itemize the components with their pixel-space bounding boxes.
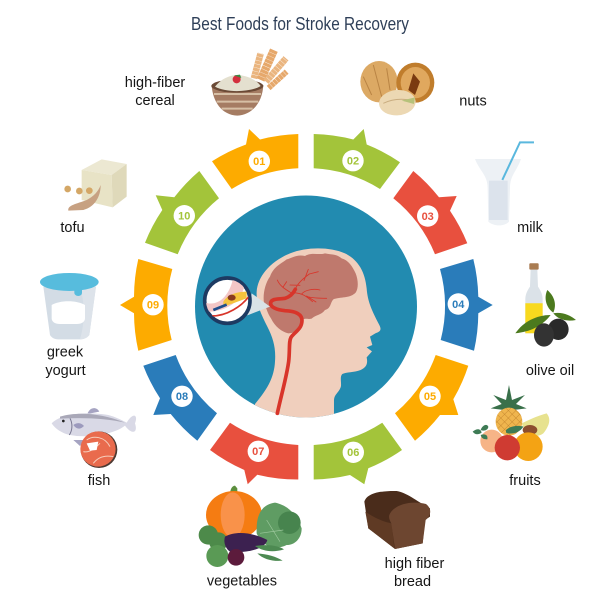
label: milk: milk: [517, 220, 544, 236]
segment 07: [210, 423, 298, 484]
label: high-fiber cereal: [125, 75, 185, 109]
icon: high fiber bread: [364, 491, 430, 549]
title: Best Foods for Stroke Recovery: [191, 14, 409, 34]
segment 04: 04: [452, 299, 465, 311]
label: high fiber bread: high fiber: [385, 556, 444, 572]
segment 03: [393, 171, 467, 254]
artery: [271, 269, 327, 413]
pointer triangle: [247, 293, 270, 315]
head silhouette: [255, 248, 381, 420]
icon: olive oil: [515, 263, 576, 347]
icon: high-fiber cereal bowl: [211, 50, 287, 116]
segment 01: 01: [253, 156, 265, 168]
segment 01: [212, 129, 298, 189]
segment 09: [120, 259, 172, 351]
label: olive oil: olive oil: [526, 363, 574, 379]
label: fruits: fruits: [509, 473, 541, 489]
label: high-fiber cereal: high-fiber: [125, 75, 185, 91]
icon: fish and salmon steak: [52, 408, 136, 468]
label: high fiber bread: [385, 556, 444, 590]
segment 05: [395, 355, 468, 441]
segment 09: 09: [147, 300, 159, 312]
label: high fiber bread: bread: [394, 574, 431, 590]
segment 08: [143, 355, 217, 441]
segment 02: 02: [347, 156, 359, 168]
segment 07: 07: [252, 446, 264, 458]
label: high-fiber cereal: cereal: [135, 93, 175, 109]
label: vegetables: vegetables: [207, 574, 277, 590]
icon: glass of milk: [475, 142, 534, 225]
icon: vegetables: [199, 486, 302, 567]
brain: [264, 253, 358, 333]
icon: greek yogurt: [40, 273, 99, 339]
icon: fruits: [473, 385, 549, 461]
center circle with head: [195, 196, 417, 420]
label: greek yogurt: greek: [47, 345, 84, 361]
magnifier: [203, 277, 250, 323]
label: greek yogurt: yogurt: [45, 363, 86, 379]
label: greek yogurt: [45, 345, 86, 379]
segment 02: [314, 129, 400, 189]
segment 06: 06: [347, 447, 359, 459]
segment 10: 10: [178, 211, 190, 223]
segment 08: 08: [176, 391, 188, 403]
icon: nuts: [360, 61, 434, 117]
segment 05: 05: [424, 391, 436, 403]
segment 03: 03: [422, 211, 434, 223]
label: fish: fish: [88, 473, 110, 489]
segment 04: [440, 259, 493, 351]
label: tofu: tofu: [60, 220, 85, 236]
icon: tofu and soybeans: [64, 159, 127, 211]
segment 10: [145, 171, 219, 254]
label: nuts: nuts: [459, 94, 487, 110]
segment 06: [314, 423, 402, 484]
